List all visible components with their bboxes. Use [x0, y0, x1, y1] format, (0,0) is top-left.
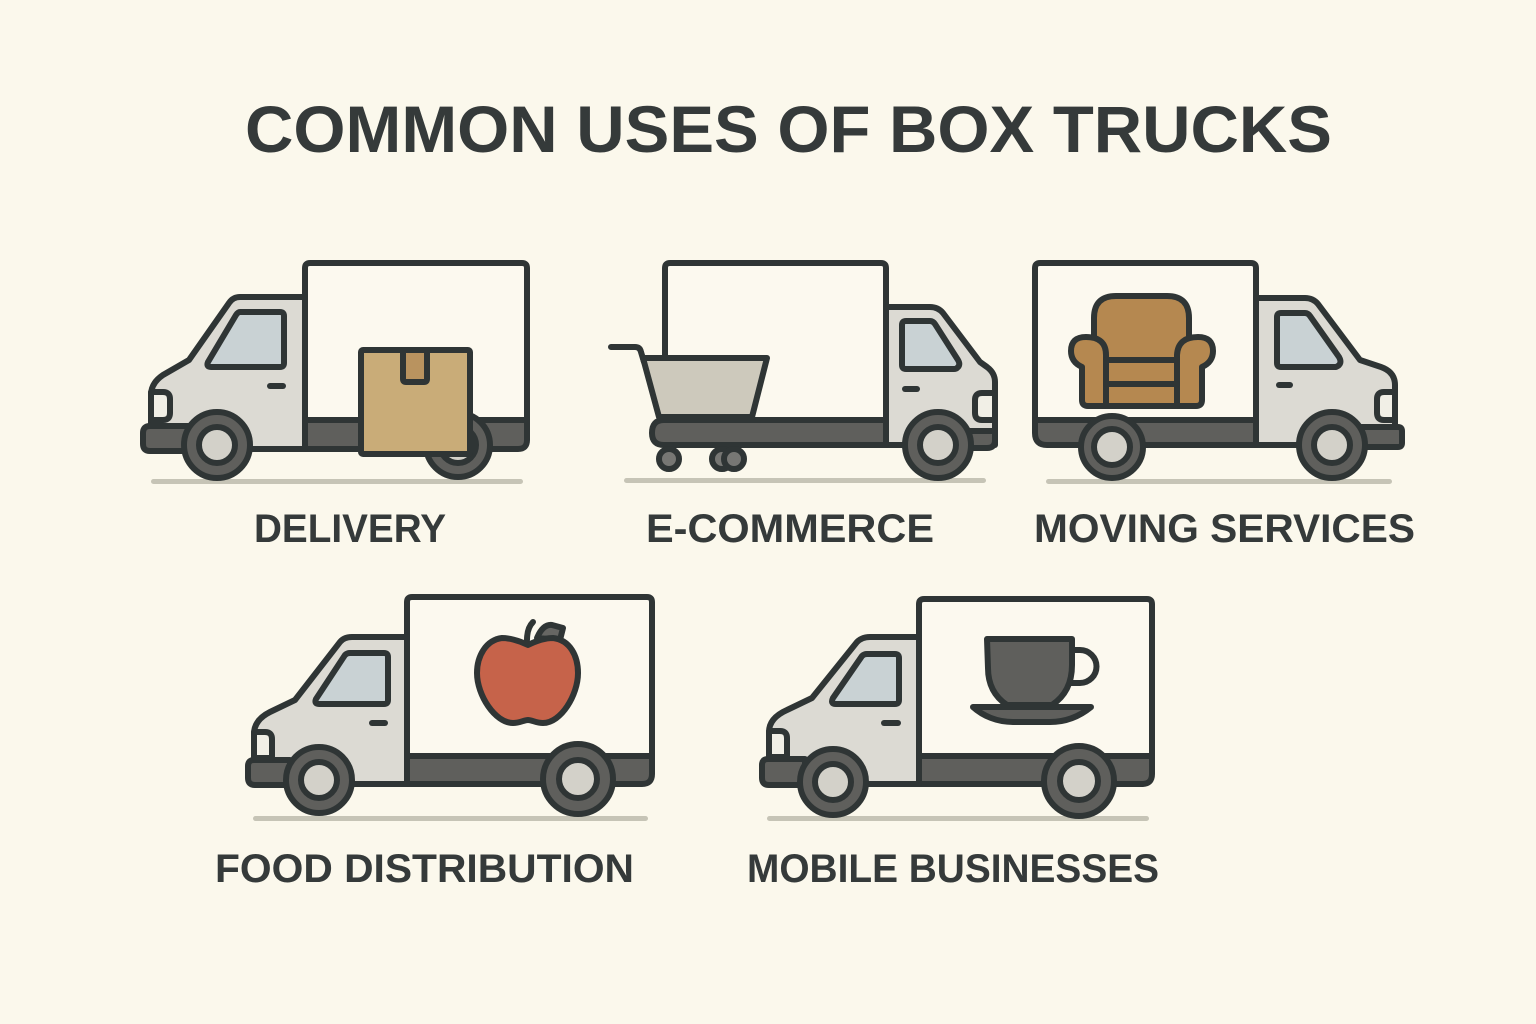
truck chassis: [919, 756, 1152, 784]
truck chassis: [305, 420, 527, 449]
window: [315, 653, 388, 704]
icon: cardboard box: [361, 350, 470, 454]
front wheel: [286, 747, 352, 813]
front wheel: [1299, 412, 1365, 478]
door handle: [905, 386, 917, 392]
truck chassis: [1035, 420, 1256, 445]
truck body: cargo box: [407, 597, 652, 756]
panel: e-commerce: [611, 263, 995, 551]
window: [207, 312, 284, 367]
window: [902, 321, 959, 369]
rear wheel: [543, 744, 613, 814]
door handle: [372, 720, 385, 726]
panel: food distribution: [215, 597, 652, 891]
door handle: [270, 383, 283, 389]
headlight: [151, 392, 170, 420]
truck cab: [151, 297, 305, 449]
label: E-COMMERCE: [646, 507, 934, 551]
bumper: [248, 760, 290, 785]
ground line: [253, 816, 648, 821]
rear wheel: [1044, 746, 1114, 816]
bumper: [762, 759, 805, 785]
panel: delivery: [143, 263, 527, 551]
rear wheel: [1081, 416, 1143, 478]
headlight: [975, 393, 995, 420]
icon: apple: [477, 622, 578, 723]
truck cab: [769, 637, 919, 784]
headlight: [254, 732, 272, 758]
panel: mobile businesses: [747, 599, 1159, 891]
window: [832, 654, 899, 704]
panel: moving services: [1034, 263, 1415, 551]
truck chassis: [652, 420, 886, 445]
bumper: [1360, 427, 1402, 447]
truck cab: [1256, 298, 1395, 445]
ground line: [767, 816, 1149, 821]
ground line: [624, 478, 986, 483]
label: FOOD DISTRIBUTION: [215, 847, 634, 891]
truck body: cargo box: [1035, 263, 1256, 420]
truck cab: [254, 637, 407, 784]
title: COMMON USES OF BOX TRUCKS: [245, 92, 1332, 166]
truck cab: [886, 307, 995, 445]
headlight: [769, 731, 787, 757]
rear wheel: [426, 413, 490, 477]
ground line: [1046, 479, 1392, 484]
ground line: [151, 479, 523, 484]
front wheel: [905, 412, 971, 478]
label: MOBILE BUSINESSES: [747, 847, 1159, 891]
front wheel: [184, 412, 250, 478]
bumper: [965, 431, 995, 448]
icon: armchair: [1071, 296, 1213, 406]
icon: coffee cup: [973, 639, 1096, 722]
label: DELIVERY: [254, 507, 446, 551]
window: [1277, 313, 1340, 367]
icon: shopping cart: [611, 347, 767, 469]
headlight: [1377, 392, 1395, 420]
door handle: [1279, 382, 1290, 388]
front wheel: [800, 749, 866, 815]
truck chassis: [407, 756, 652, 784]
door handle: [884, 720, 898, 726]
truck body: cargo box: [919, 599, 1152, 756]
bumper: [143, 426, 190, 451]
label: MOVING SERVICES: [1034, 507, 1415, 551]
truck body: cargo box: [665, 263, 886, 420]
truck body: cargo box: [305, 263, 527, 420]
